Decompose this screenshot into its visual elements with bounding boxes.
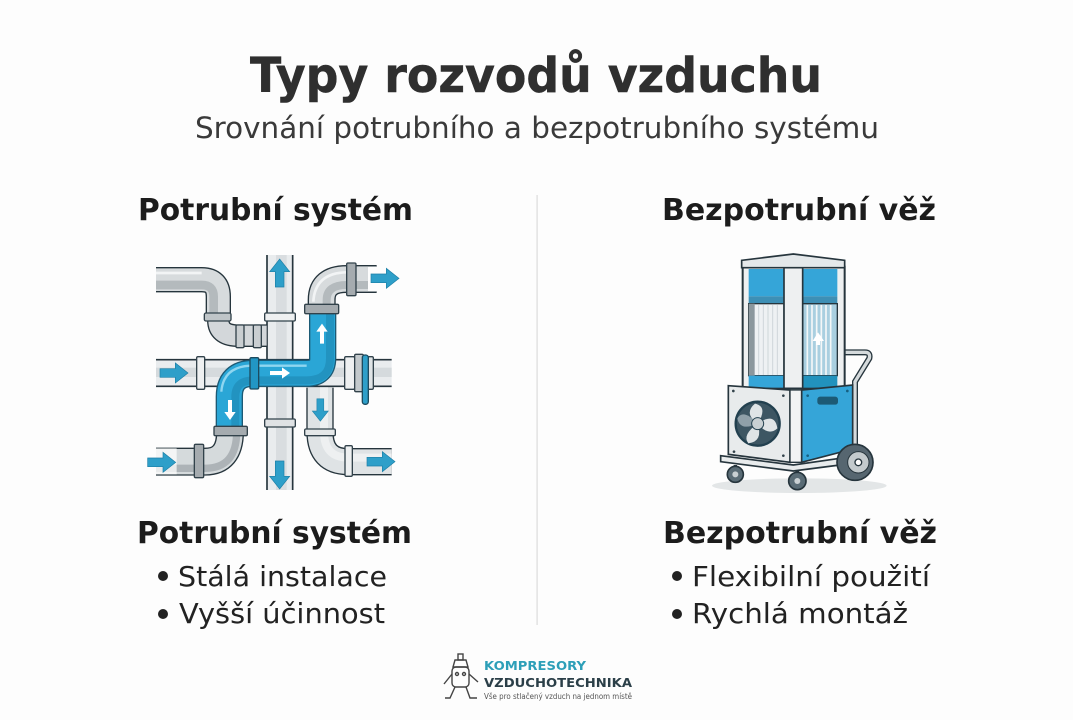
fan [736, 402, 780, 446]
arrows [148, 259, 399, 489]
tower body [742, 254, 845, 388]
heading: left top: Potrubní systém [138, 193, 413, 228]
subtitle: Srovnání potrubního a bezpotrubního systému [195, 111, 879, 145]
lower-left elbow pipe [156, 432, 237, 478]
base unit [728, 385, 853, 462]
text block: left [137, 516, 412, 630]
left bullet 2: Vyšší účinnost [179, 597, 385, 630]
text block: right [663, 516, 937, 630]
right bullet 2: Rychlá montáž [692, 597, 908, 630]
illustration: ductless tower [712, 254, 887, 493]
platform and wheels [721, 444, 873, 490]
top-left elbow pipe [156, 273, 267, 348]
tagline: Vše pro stlačený vzduch na jednom místě [484, 691, 632, 701]
logo [444, 654, 632, 701]
upper-right elbow pipe [313, 263, 378, 307]
icon: compressor mascot [444, 654, 478, 698]
heading: right top: Bezpotrubní věž [662, 193, 936, 228]
title: Typy rozvodů vzduchu [250, 48, 822, 104]
handle [843, 352, 870, 445]
brand name 2: VZDUCHOTECHNIKA [484, 675, 632, 690]
blue pipe [214, 304, 339, 436]
right subheading: Bezpotrubní věž [663, 516, 937, 551]
lower-right elbow pipe [305, 388, 392, 476]
vertical pipe [265, 255, 295, 490]
right bullet 1: Flexibilní použití [692, 560, 931, 593]
left bullet 1: Stálá instalace [178, 560, 387, 593]
floor shadow [712, 478, 887, 493]
brand name: KOMPRESORY [484, 658, 587, 673]
horizontal pipe [156, 354, 392, 404]
left subheading: Potrubní systém [137, 516, 412, 551]
illustration: pipe system [148, 255, 399, 490]
